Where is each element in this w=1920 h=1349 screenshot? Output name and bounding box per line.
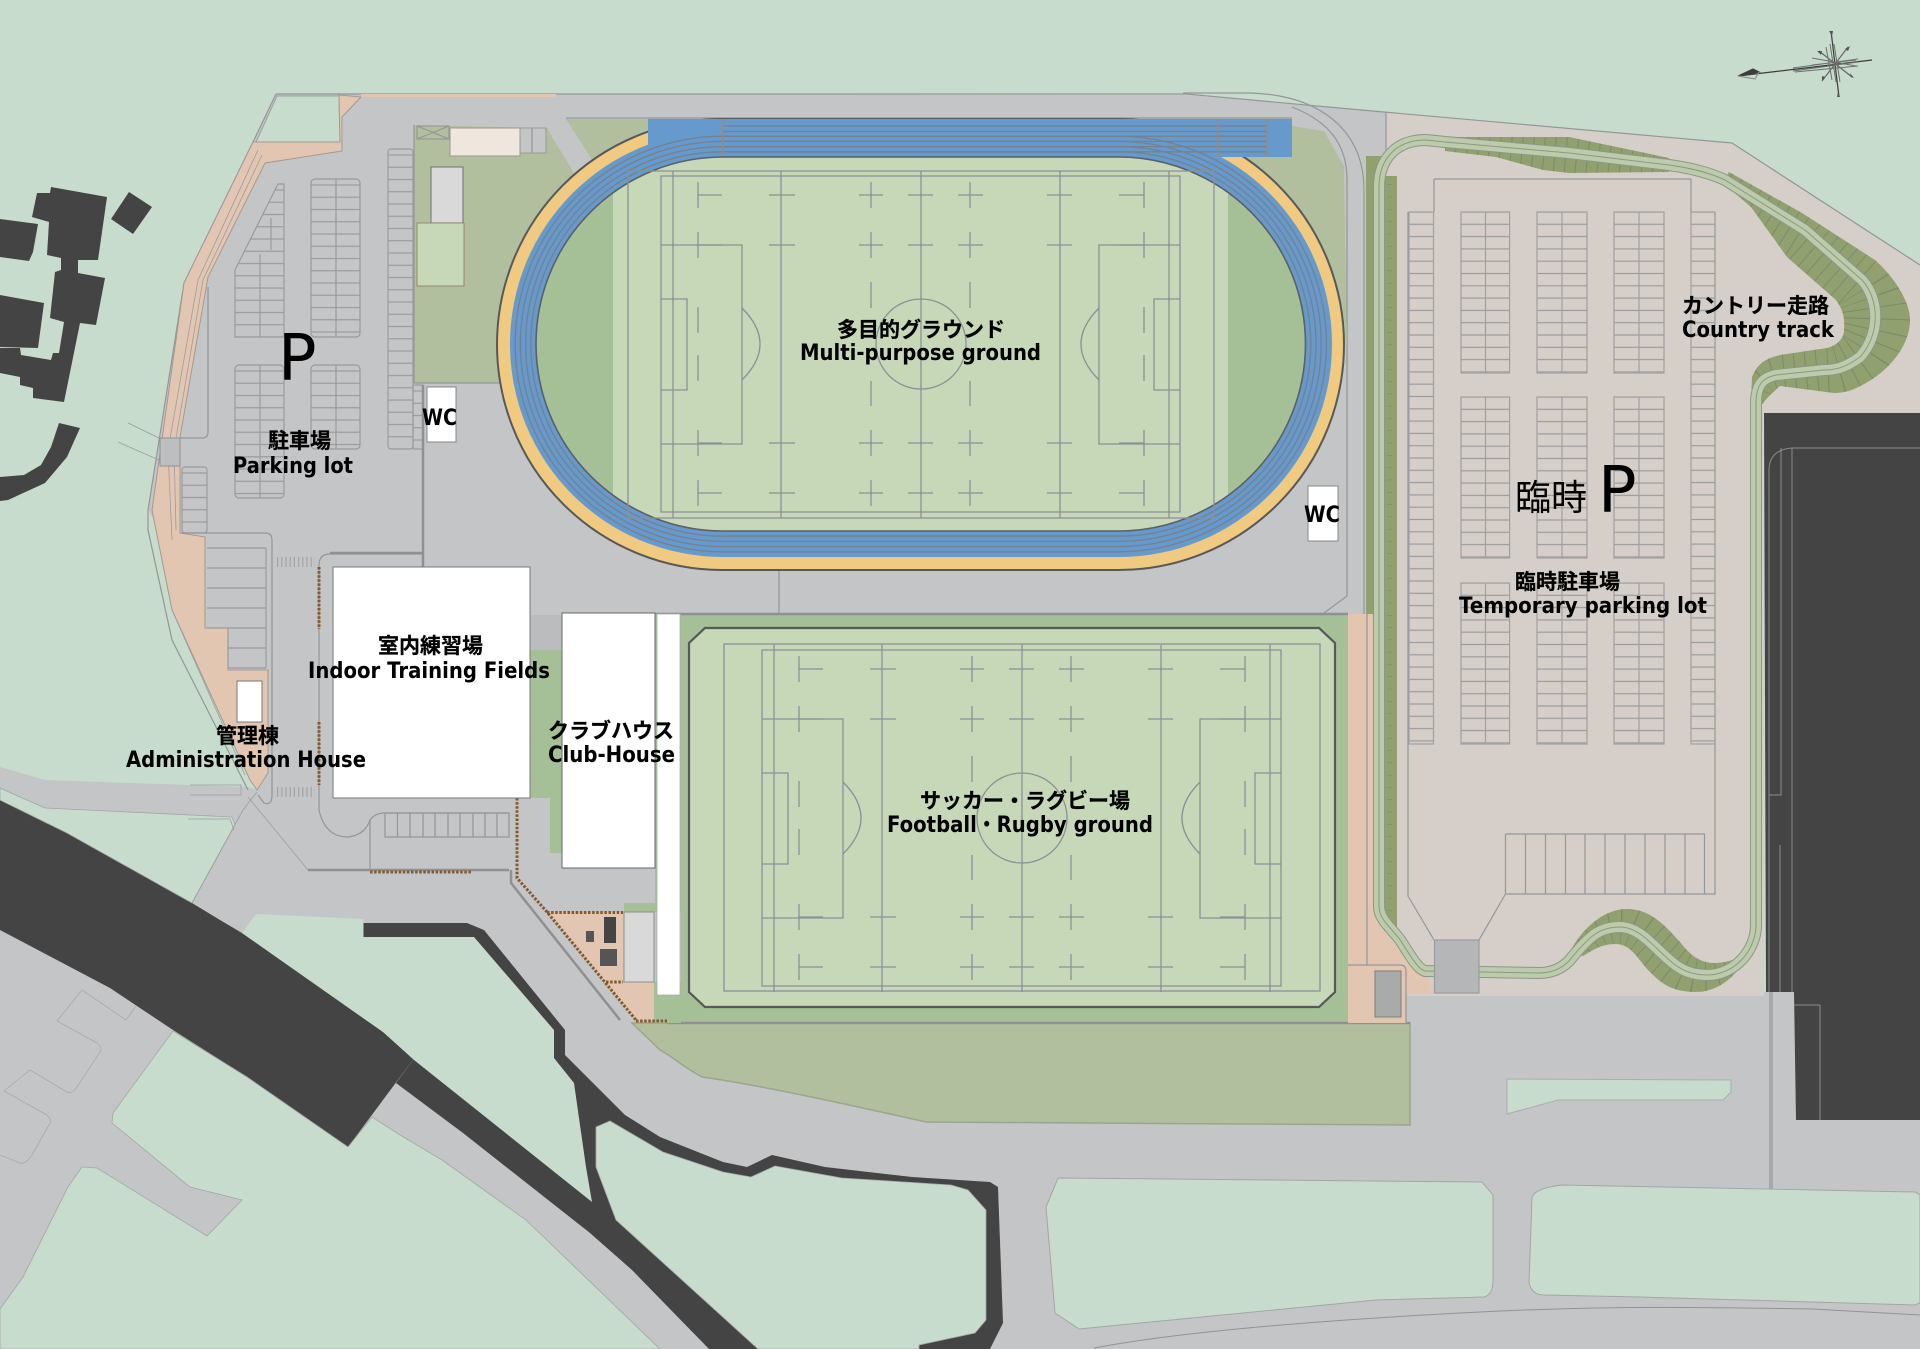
label: parking lot P mark: P xyxy=(278,322,317,396)
green strip and pavement beside club house xyxy=(530,614,681,1023)
olive embankments of country track xyxy=(1366,137,1910,992)
label: parking lot xyxy=(233,430,353,479)
building: club house xyxy=(562,613,655,868)
inner roads and fences near indoor training fields xyxy=(188,385,620,1020)
label: indoor training fields xyxy=(308,635,550,684)
compass xyxy=(1738,31,1872,97)
label: parking lot: Parking lot xyxy=(233,454,353,479)
label: administration house: Administration House xyxy=(126,748,366,773)
label: indoor training fields: 室内練習場 xyxy=(378,635,483,658)
label: temporary parking lot xyxy=(1459,571,1707,619)
label: WC east: WC xyxy=(1304,503,1340,528)
building: WC west xyxy=(427,387,456,442)
label: WC west: WC xyxy=(422,406,457,431)
small green island south of parking xyxy=(1507,1079,1731,1114)
dark neighbouring site, east xyxy=(1764,413,1920,1189)
brown fence lines xyxy=(319,567,667,1021)
label: temporary parking lot: 臨時駐車場 xyxy=(1515,571,1620,594)
green land plots, south west xyxy=(0,788,986,1349)
building: indoor training fields xyxy=(333,567,530,798)
label: multi-purpose ground: 多目的グラウンド xyxy=(837,318,1005,342)
label: multi-purpose ground: Multi-purpose ground xyxy=(800,341,1041,366)
label: football and rugby ground xyxy=(887,789,1153,838)
green patches south east xyxy=(1046,1178,1920,1348)
label: indoor training fields: Indoor Training Fields xyxy=(308,659,550,684)
label: temporary parking lot: Temporary parking lot xyxy=(1459,594,1707,619)
green lot outside north-west corner xyxy=(256,96,340,142)
temporary parking ground surface xyxy=(1374,112,1920,996)
olive green ground south of football ground xyxy=(632,1023,1410,1125)
label: country track xyxy=(1682,295,1835,343)
site boundary lines xyxy=(148,93,1920,790)
label: country track: Country track xyxy=(1682,318,1835,343)
salmon service yard xyxy=(547,912,654,1020)
label: parking lot: 駐車場 xyxy=(268,430,331,453)
label: temporary P mark: 臨時 xyxy=(1515,477,1587,518)
multi-purpose ground: running track xyxy=(497,119,1344,570)
temporary parking bays xyxy=(1408,179,1715,993)
label: administration house xyxy=(126,725,366,773)
olive green grounds around multi-purpose ground xyxy=(414,118,1347,383)
label: football and rugby ground: サッカー・ラグビー場 xyxy=(920,789,1130,813)
label: temporary P mark xyxy=(1515,454,1637,528)
label: multi-purpose ground xyxy=(800,318,1041,366)
label: club house: Club-House xyxy=(548,743,675,768)
label: club house: クラブハウス xyxy=(548,719,674,743)
football and rugby ground xyxy=(562,614,1410,1023)
label: club house xyxy=(548,719,675,768)
building: administration house xyxy=(237,681,262,722)
building: WC east xyxy=(1308,486,1338,541)
multi-purpose ground: infield xyxy=(536,157,1306,531)
small facilities north of track xyxy=(417,126,546,286)
country track xyxy=(1379,140,1875,975)
building: club house annex strip xyxy=(657,614,680,995)
crosswalks xyxy=(277,562,315,792)
salmon paved strip, west side xyxy=(118,94,556,790)
label: temporary P mark: P xyxy=(1598,454,1637,528)
west buildings xyxy=(0,187,152,501)
left parking bays xyxy=(180,149,423,804)
label: football and rugby ground: Football・Rugby ground xyxy=(887,813,1153,838)
salmon plaza east of football ground with gravel pad xyxy=(1348,614,1434,1023)
label: country track: カントリー走路 xyxy=(1682,295,1829,318)
dark railway bands xyxy=(0,800,1003,1349)
label: administration house: 管理棟 xyxy=(216,725,279,748)
